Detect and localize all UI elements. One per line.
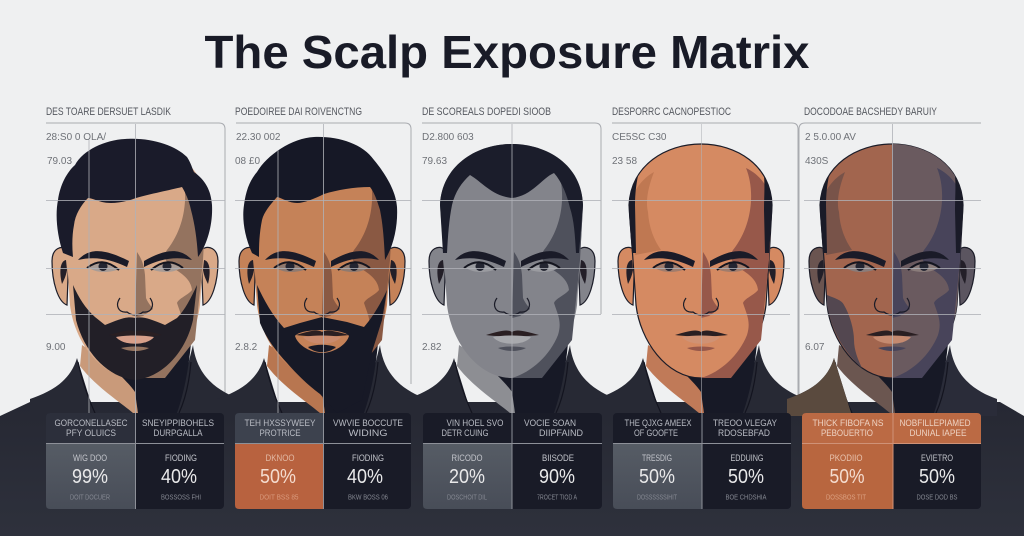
axis labels two bbox=[235, 132, 281, 353]
card five bbox=[802, 413, 981, 509]
highlighted stat bbox=[423, 444, 512, 509]
card base bbox=[423, 413, 602, 509]
card two bbox=[235, 413, 411, 509]
card labels: DUNIAL IAPEE bbox=[910, 428, 966, 439]
card labels: DIIPFAIND bbox=[539, 428, 583, 439]
card labels: PFY OLUICS bbox=[66, 428, 116, 439]
card one bbox=[46, 413, 224, 509]
panel: face four, bald crown in orange bbox=[596, 106, 806, 416]
dividers bbox=[423, 413, 602, 509]
card labels: FIODING bbox=[352, 453, 384, 464]
axis labels three: D2.800 603 bbox=[422, 132, 474, 143]
portrait two bbox=[217, 137, 427, 416]
card labels bbox=[244, 418, 403, 502]
card labels: THICK FIBOFA NS bbox=[812, 418, 884, 429]
axis labels five: 430S bbox=[805, 156, 829, 167]
card four bbox=[613, 413, 791, 509]
card labels: TEH HXSSYWEEY bbox=[244, 418, 316, 429]
measuring grid three bbox=[422, 124, 601, 413]
card labels: DETR CUING bbox=[442, 428, 488, 439]
axis labels two: 2.8.2 bbox=[235, 342, 258, 353]
highlighted stat bbox=[802, 444, 893, 509]
panel: face one, full hair and beard bbox=[30, 106, 240, 416]
panel frame one bbox=[46, 123, 225, 412]
card three bbox=[423, 413, 602, 509]
axis labels one: 79.03 bbox=[47, 156, 72, 167]
card labels: 40% bbox=[347, 466, 383, 488]
card labels bbox=[54, 418, 214, 502]
card labels: NOBFILLEPIAMED bbox=[900, 418, 971, 429]
highlighted stat bbox=[46, 444, 136, 509]
axis labels one: 28:S0 0 OLA/ bbox=[46, 132, 106, 143]
highlighted stat bbox=[235, 444, 324, 509]
card labels bbox=[442, 418, 583, 502]
panel frame three bbox=[422, 123, 601, 314]
card labels: RICODO bbox=[452, 453, 482, 464]
card labels: 20% bbox=[449, 466, 485, 488]
axis labels four: 23 58 bbox=[612, 156, 637, 167]
axis labels four bbox=[612, 132, 667, 167]
card labels: DOSCHOIT DIL bbox=[447, 494, 487, 502]
card labels: DOIT BSS 85 bbox=[260, 494, 299, 502]
axis labels one bbox=[46, 132, 106, 353]
card base bbox=[802, 413, 981, 509]
card labels: PKODIIO bbox=[830, 453, 862, 464]
card labels: 50% bbox=[639, 466, 675, 488]
axis labels five: 6.07 bbox=[805, 342, 825, 353]
card labels: 90% bbox=[539, 466, 575, 488]
card labels: DURPGALLA bbox=[154, 428, 203, 439]
panel frame two bbox=[236, 123, 411, 384]
card labels: BIISODE bbox=[542, 453, 574, 464]
portrait five bbox=[787, 144, 997, 416]
card labels: DKNOO bbox=[266, 453, 294, 464]
axis labels one: 9.00 bbox=[46, 342, 66, 353]
card labels: VWVIE BOCCUTE bbox=[333, 418, 403, 429]
measuring grid one bbox=[46, 124, 225, 413]
panel: face two, full hair and heavy beard bbox=[217, 106, 427, 416]
highlighted stat bbox=[613, 444, 702, 509]
card labels: DOSSSSSSIHIT bbox=[637, 494, 678, 502]
card labels: 50% bbox=[919, 466, 955, 488]
card labels bbox=[624, 418, 778, 502]
axis labels five bbox=[805, 132, 856, 353]
card labels: RDOSEBFAD bbox=[718, 428, 770, 439]
portrait one bbox=[30, 139, 240, 416]
measuring grid four bbox=[612, 124, 790, 413]
axis labels two: 08 £0 bbox=[235, 156, 260, 167]
measuring grid two bbox=[235, 124, 411, 413]
card labels: DOSSBOS TIT bbox=[826, 494, 867, 502]
card labels bbox=[812, 418, 971, 502]
panel frame four bbox=[612, 123, 798, 400]
card labels: FIODING bbox=[165, 453, 197, 464]
axis labels five: 2 5.0.00 AV bbox=[805, 132, 856, 143]
portrait three bbox=[407, 144, 617, 416]
card labels: BKW BOSS 06 bbox=[348, 494, 388, 502]
card labels: 50% bbox=[728, 466, 764, 488]
card labels: BOSSOSS FHI bbox=[161, 494, 201, 502]
card labels: WIG DOO bbox=[73, 453, 107, 464]
panel heading five: DOCODOAE BACSHEDY BARUIY bbox=[804, 106, 938, 118]
card base bbox=[235, 413, 411, 509]
card labels: PROTRICE bbox=[260, 428, 300, 439]
card labels: PEBOUERTIO bbox=[821, 428, 873, 439]
measuring grid five bbox=[804, 124, 981, 413]
card labels: 40% bbox=[161, 466, 197, 488]
panel: face five, bald split tone bbox=[787, 106, 997, 416]
card labels: VIN HOEL SVO bbox=[446, 418, 504, 429]
axis labels four: CE5SC C30 bbox=[612, 132, 667, 143]
axis labels three bbox=[422, 132, 474, 353]
card labels: BOE CHDSHIA bbox=[726, 494, 767, 502]
card labels: TREOO VLEGAY bbox=[713, 418, 778, 429]
card labels: EDDUING bbox=[730, 453, 764, 464]
portrait four bbox=[596, 144, 806, 416]
header tint bbox=[46, 413, 136, 443]
card labels: DOSE DOD BS bbox=[916, 494, 958, 502]
card labels: DOIT DOCUER bbox=[70, 494, 110, 502]
card labels: WIDING bbox=[348, 428, 388, 439]
dividers bbox=[802, 413, 981, 509]
axis labels two: 22.30 002 bbox=[236, 132, 281, 143]
dark lower band bbox=[0, 402, 1024, 536]
card labels: 50% bbox=[260, 466, 296, 488]
panel heading three: DE SCOREALS DOPEDI SIOOB bbox=[422, 106, 551, 118]
dividers bbox=[613, 413, 791, 509]
axis labels three: 79.63 bbox=[422, 156, 447, 167]
card labels: SNEYIPPIBOHELS bbox=[142, 418, 214, 429]
orange header bbox=[802, 413, 981, 444]
card labels: 7ROCET TIOD A bbox=[537, 494, 577, 502]
panel: face three, buzz cut in grey bbox=[407, 106, 617, 416]
panel heading one: DES TOARE DERSUET LASDIK bbox=[46, 106, 172, 118]
card labels: GORCONELLASEC bbox=[54, 418, 128, 429]
panel heading four: DESPORRC CACNOPESTIOC bbox=[612, 106, 731, 118]
header tint bbox=[235, 413, 324, 443]
card base bbox=[613, 413, 791, 509]
card labels: TRESDIG bbox=[642, 453, 672, 464]
card labels: VOCIE SOAN bbox=[524, 418, 576, 429]
card labels: 99% bbox=[72, 466, 108, 488]
axis labels three: 2.82 bbox=[422, 342, 442, 353]
dividers bbox=[235, 413, 411, 509]
card labels: 50% bbox=[830, 466, 865, 488]
title: The Scalp Exposure Matrix bbox=[204, 26, 810, 78]
card labels: OF GOOFTE bbox=[634, 428, 678, 439]
panel heading two: POEDOIREE DAI ROIVENCTNG bbox=[235, 106, 362, 118]
card base bbox=[46, 413, 224, 509]
dividers bbox=[46, 413, 224, 509]
panel frame five bbox=[799, 123, 981, 396]
card labels: EVIETRO bbox=[921, 453, 953, 464]
card labels: THE QJXG AMEEX bbox=[624, 418, 692, 429]
